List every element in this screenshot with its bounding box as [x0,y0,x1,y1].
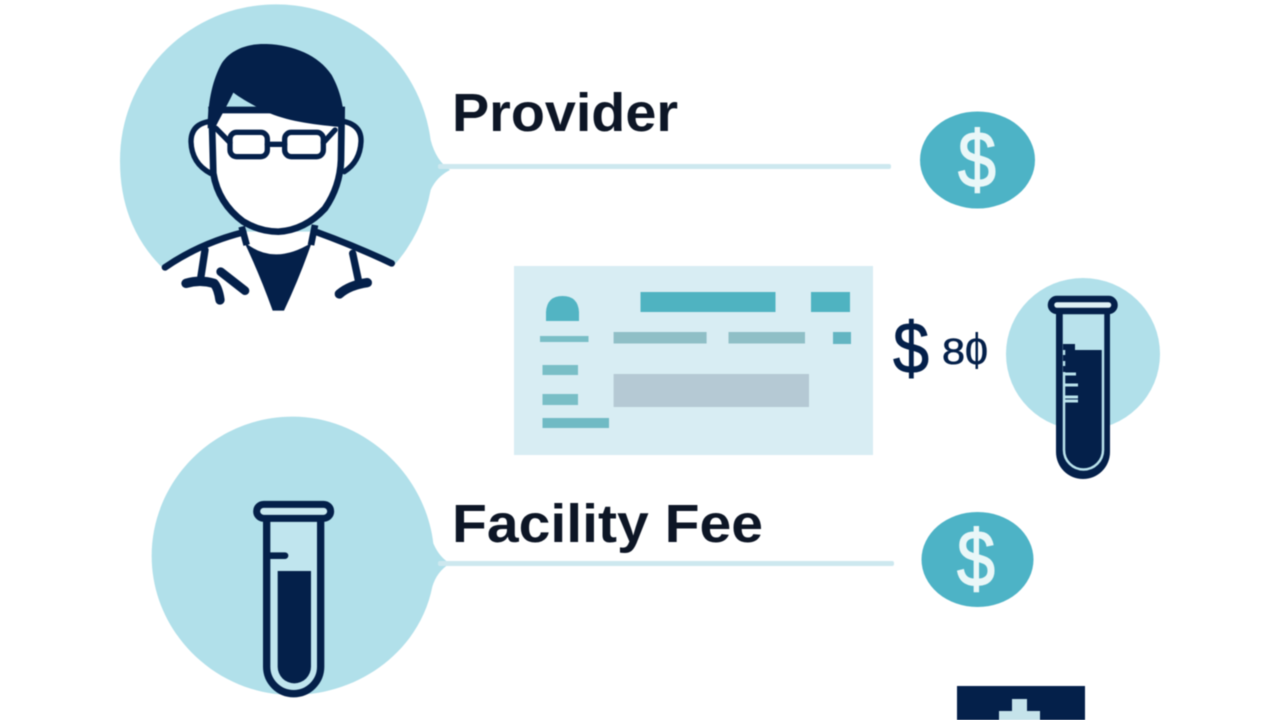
chest background [163,232,393,320]
document header bars [640,292,850,312]
tube interior [1064,312,1102,350]
tube lip [257,504,331,518]
price label: 80 [942,331,988,372]
connector line: provider [438,164,891,169]
connector line: facility [438,561,894,566]
icon: lab tube on circle [1006,278,1160,479]
tube tick [271,546,285,566]
neck [242,225,315,245]
tube ticks [1063,347,1082,369]
ears [191,122,361,173]
provider circle with pointer [120,4,450,318]
face [212,110,342,232]
price label: $ [893,309,929,389]
facility circle with pointer [152,417,450,695]
price label [893,309,988,389]
shirt [244,242,312,311]
tube outline [267,520,321,694]
icon: test tube in circle [152,417,450,695]
cross [999,699,1040,720]
tube body [1056,310,1110,479]
tube lip [1051,299,1114,311]
tube liquid [1066,350,1098,375]
glasses [216,128,335,157]
tube liquid [278,571,311,683]
shoulders [165,232,392,267]
icon: provider dollar coin [920,112,1035,208]
icon: first aid case [957,686,1085,720]
document logo [546,296,579,321]
icon: facility dollar coin: $ [957,514,995,603]
stethoscope [186,250,367,300]
icon: provider dollar coin: $ [958,115,996,204]
icon: facility dollar coin [922,512,1034,607]
panel: bill document [514,266,873,455]
hair [208,44,344,128]
heading: Provider: Provider [452,83,678,143]
icon: provider portrait [120,4,450,320]
heading: Facility Fee: Facility Fee [452,494,763,554]
document rows [540,332,851,428]
tube highlight [1064,312,1103,470]
